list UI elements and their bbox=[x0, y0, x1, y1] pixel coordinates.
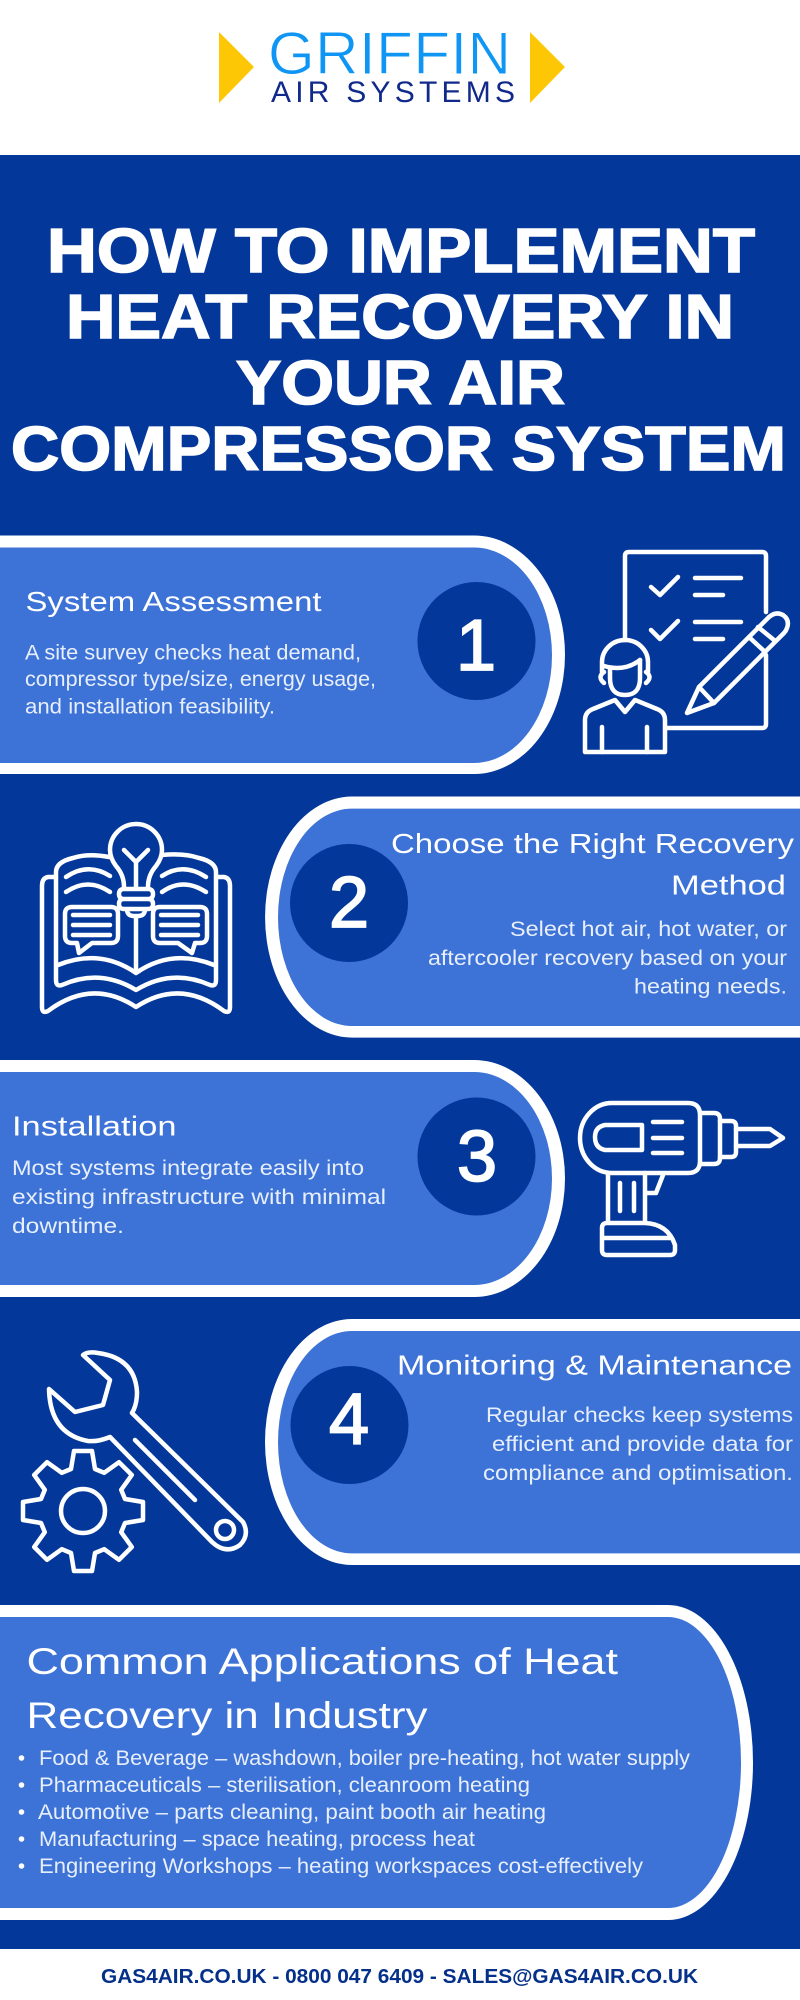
step 2 number badge: 2 bbox=[329, 863, 369, 943]
applications bullet list: Pharmaceuticals – sterilisation, cleanroom heating bbox=[39, 1774, 530, 1797]
panel: step 1 system assessment bbox=[0, 536, 565, 774]
panel: common applications bbox=[0, 1605, 753, 1920]
title: HEAT RECOVERY IN bbox=[66, 283, 734, 352]
logo: Griffin Air Systems bbox=[219, 20, 565, 109]
step 4 body text: compliance and optimisation. bbox=[483, 1462, 793, 1485]
step 4 number badge: 4 bbox=[329, 1380, 369, 1460]
panel: step 4 monitoring and maintenance bbox=[265, 1319, 800, 1565]
panel: step 2 choose recovery method bbox=[265, 796, 800, 1038]
icon: open book with light bulb bbox=[42, 824, 230, 1012]
step 1 body text: and installation feasibility. bbox=[25, 696, 275, 718]
step 3 heading: Installation bbox=[12, 1110, 176, 1142]
step 3 body text bbox=[12, 1157, 386, 1238]
applications bullet list: Engineering Workshops – heating workspaces cost-effectively bbox=[39, 1855, 644, 1878]
title: HOW TO IMPLEMENT bbox=[47, 217, 755, 286]
step 1 number badge: 1 bbox=[456, 606, 496, 686]
step 2 number badge bbox=[290, 844, 408, 962]
step 2 heading: Choose the Right Recovery bbox=[391, 828, 794, 859]
applications bullet list: Food & Beverage – washdown, boiler pre-heating, hot water supply bbox=[39, 1747, 691, 1770]
step 3 body text: existing infrastructure with minimal bbox=[12, 1186, 386, 1209]
logo: Griffin Air Systems: GRIFFIN bbox=[268, 20, 511, 87]
panel: step 3 installation bbox=[0, 1060, 565, 1297]
step 4 body text: efficient and provide data for bbox=[492, 1433, 793, 1456]
title: YOUR AIR bbox=[236, 349, 565, 418]
step 3 body text: downtime. bbox=[12, 1215, 124, 1238]
step 1 body text: A site survey checks heat demand, bbox=[25, 642, 361, 664]
applications bullet list: Automotive – parts cleaning, paint booth air heating bbox=[38, 1801, 546, 1824]
applications bullet list bbox=[19, 1747, 691, 1878]
title: COMPRESSOR SYSTEM bbox=[11, 415, 786, 484]
step 2 body text: Select hot air, hot water, or bbox=[510, 918, 787, 941]
step 4 number badge bbox=[290, 1366, 408, 1484]
title bbox=[11, 217, 786, 484]
applications bullet list: Manufacturing – space heating, process heat bbox=[39, 1828, 475, 1851]
footer contact line: GAS4AIR.CO.UK - 0800 047 6409 - SALES@GAS4AIR.CO.UK bbox=[101, 1966, 699, 1988]
step 1 body text: compressor type/size, energy usage, bbox=[25, 668, 376, 691]
step 4 body text bbox=[483, 1404, 793, 1485]
icon: cordless drill bbox=[580, 1103, 783, 1255]
step 3 number badge bbox=[418, 1098, 536, 1216]
step 3 body text: Most systems integrate easily into bbox=[12, 1157, 364, 1180]
step 1 heading: System Assessment bbox=[26, 586, 322, 617]
icon: wrench and gear bbox=[23, 1352, 246, 1571]
step 2 body text bbox=[428, 918, 787, 998]
step 4 heading: Monitoring & Maintenance bbox=[397, 1350, 792, 1380]
icon: checklist, person and pencil bbox=[585, 552, 788, 752]
step 2 heading: Method bbox=[671, 870, 786, 900]
applications heading: Recovery in Industry bbox=[26, 1695, 428, 1736]
step 2 heading bbox=[391, 828, 794, 900]
logo: Griffin Air Systems: AIR SYSTEMS bbox=[271, 76, 515, 109]
step 3 number badge: 3 bbox=[457, 1117, 497, 1197]
step 1 body text bbox=[25, 642, 376, 718]
step 1 number badge bbox=[418, 582, 536, 700]
applications heading bbox=[26, 1641, 619, 1736]
applications heading: Common Applications of Heat bbox=[26, 1641, 619, 1682]
step 2 body text: aftercooler recovery based on your bbox=[428, 947, 787, 970]
step 4 body text: Regular checks keep systems bbox=[486, 1404, 793, 1427]
step 2 body text: heating needs. bbox=[634, 976, 787, 998]
